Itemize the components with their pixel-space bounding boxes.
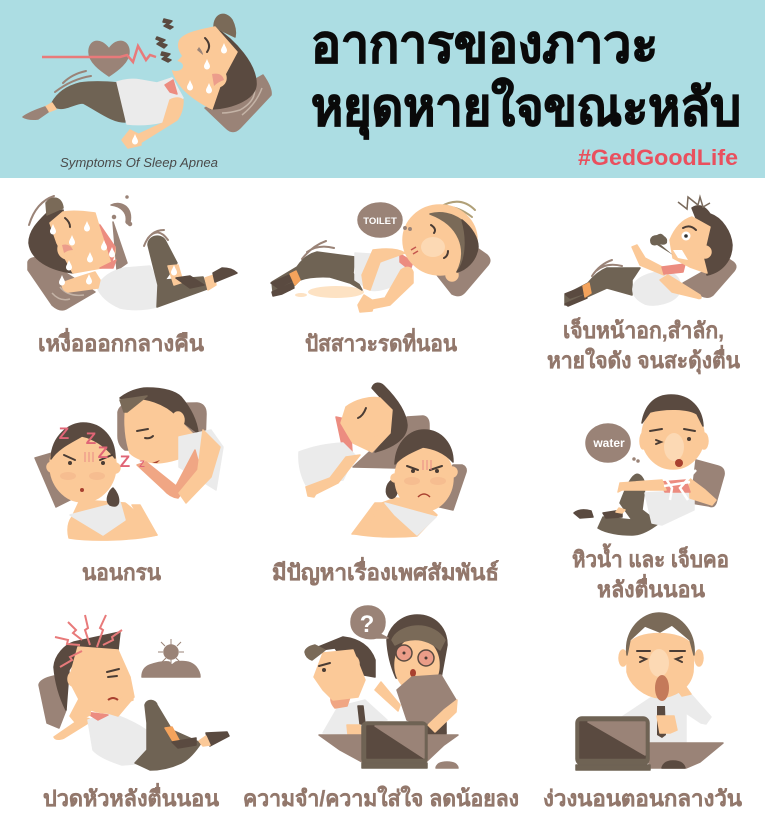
icon: sleeping man with heart — [23, 14, 271, 148]
caption: หลังตื่นนอน — [597, 573, 705, 602]
icon: computer monitor — [362, 722, 427, 768]
illustration: confused man and woman at computer — [305, 606, 458, 768]
illustration: thirsty man — [574, 395, 724, 535]
illustration: snoring man beside woman — [35, 388, 223, 540]
illustration: sweating man — [28, 196, 237, 310]
title: อาการของภาวะ — [311, 16, 658, 74]
panel: chest pain — [547, 197, 740, 375]
icon: moon and stars — [111, 196, 132, 226]
illustration: snoring man beside woman: Z — [86, 429, 96, 448]
illustration: snoring man beside woman: Z — [59, 424, 69, 443]
illustration: snoring man beside woman: Z — [98, 443, 108, 462]
illustration: yawning man at computer — [576, 613, 723, 770]
tagline: Symptoms Of Sleep Apnea — [60, 155, 218, 170]
icon: computer monitor — [576, 717, 650, 770]
caption — [572, 543, 729, 602]
caption — [547, 316, 740, 375]
illustration: snoring man beside woman: Z — [139, 459, 145, 469]
speech bubble: toilet: TOILET — [363, 216, 397, 227]
icon: sun over mountains — [142, 639, 200, 677]
caption: นอนกรน — [82, 560, 161, 585]
caption: มีปัญหาเรื่องเพศสัมพันธ์ — [272, 556, 499, 586]
caption: หิวน้ำ และ เจ็บคอ — [572, 543, 729, 572]
panel: header banner — [0, 0, 765, 178]
panel: night sweats — [28, 196, 237, 356]
illustration: snoring man beside woman: Z — [120, 452, 130, 471]
caption: ปวดหัวหลังตื่นนอน — [43, 782, 219, 811]
caption: เหงื่อออกกลางคืน — [38, 327, 204, 356]
illustration: couple in bed — [299, 383, 466, 537]
title — [311, 16, 741, 140]
illustration: man choking awake — [565, 197, 736, 306]
panel: daytime sleepiness — [543, 613, 742, 811]
speech bubble: water: water — [592, 436, 625, 450]
panel: sexual problems — [272, 383, 499, 586]
panel: morning headache — [39, 615, 229, 811]
caption: ปัสสาวะรดที่นอน — [305, 327, 457, 356]
caption: เจ็บหน้าอก,สำลัก, — [563, 316, 724, 343]
caption: ความจำ/ความใส่ใจ ลดน้อยลง — [243, 785, 519, 811]
caption: ง่วงนอนตอนกลางวัน — [543, 786, 742, 811]
panel: memory and attention — [243, 606, 519, 811]
title: หยุดหายใจขณะหลับ — [311, 77, 741, 140]
illustration: man wetting bed — [271, 202, 490, 312]
speech bubble: toilet — [358, 203, 411, 237]
speech bubble: question — [351, 606, 388, 639]
speech bubble: water — [586, 424, 639, 462]
hashtag: #GedGoodLife — [578, 145, 738, 170]
illustration: man with headache — [39, 615, 229, 770]
panel: snoring — [35, 388, 223, 585]
caption: หายใจดัง จนสะดุ้งตื่น — [547, 344, 740, 375]
speech bubble: question: ? — [360, 611, 374, 638]
panel: bedwetting — [271, 202, 490, 356]
panel: thirst and sore throat — [572, 395, 729, 602]
